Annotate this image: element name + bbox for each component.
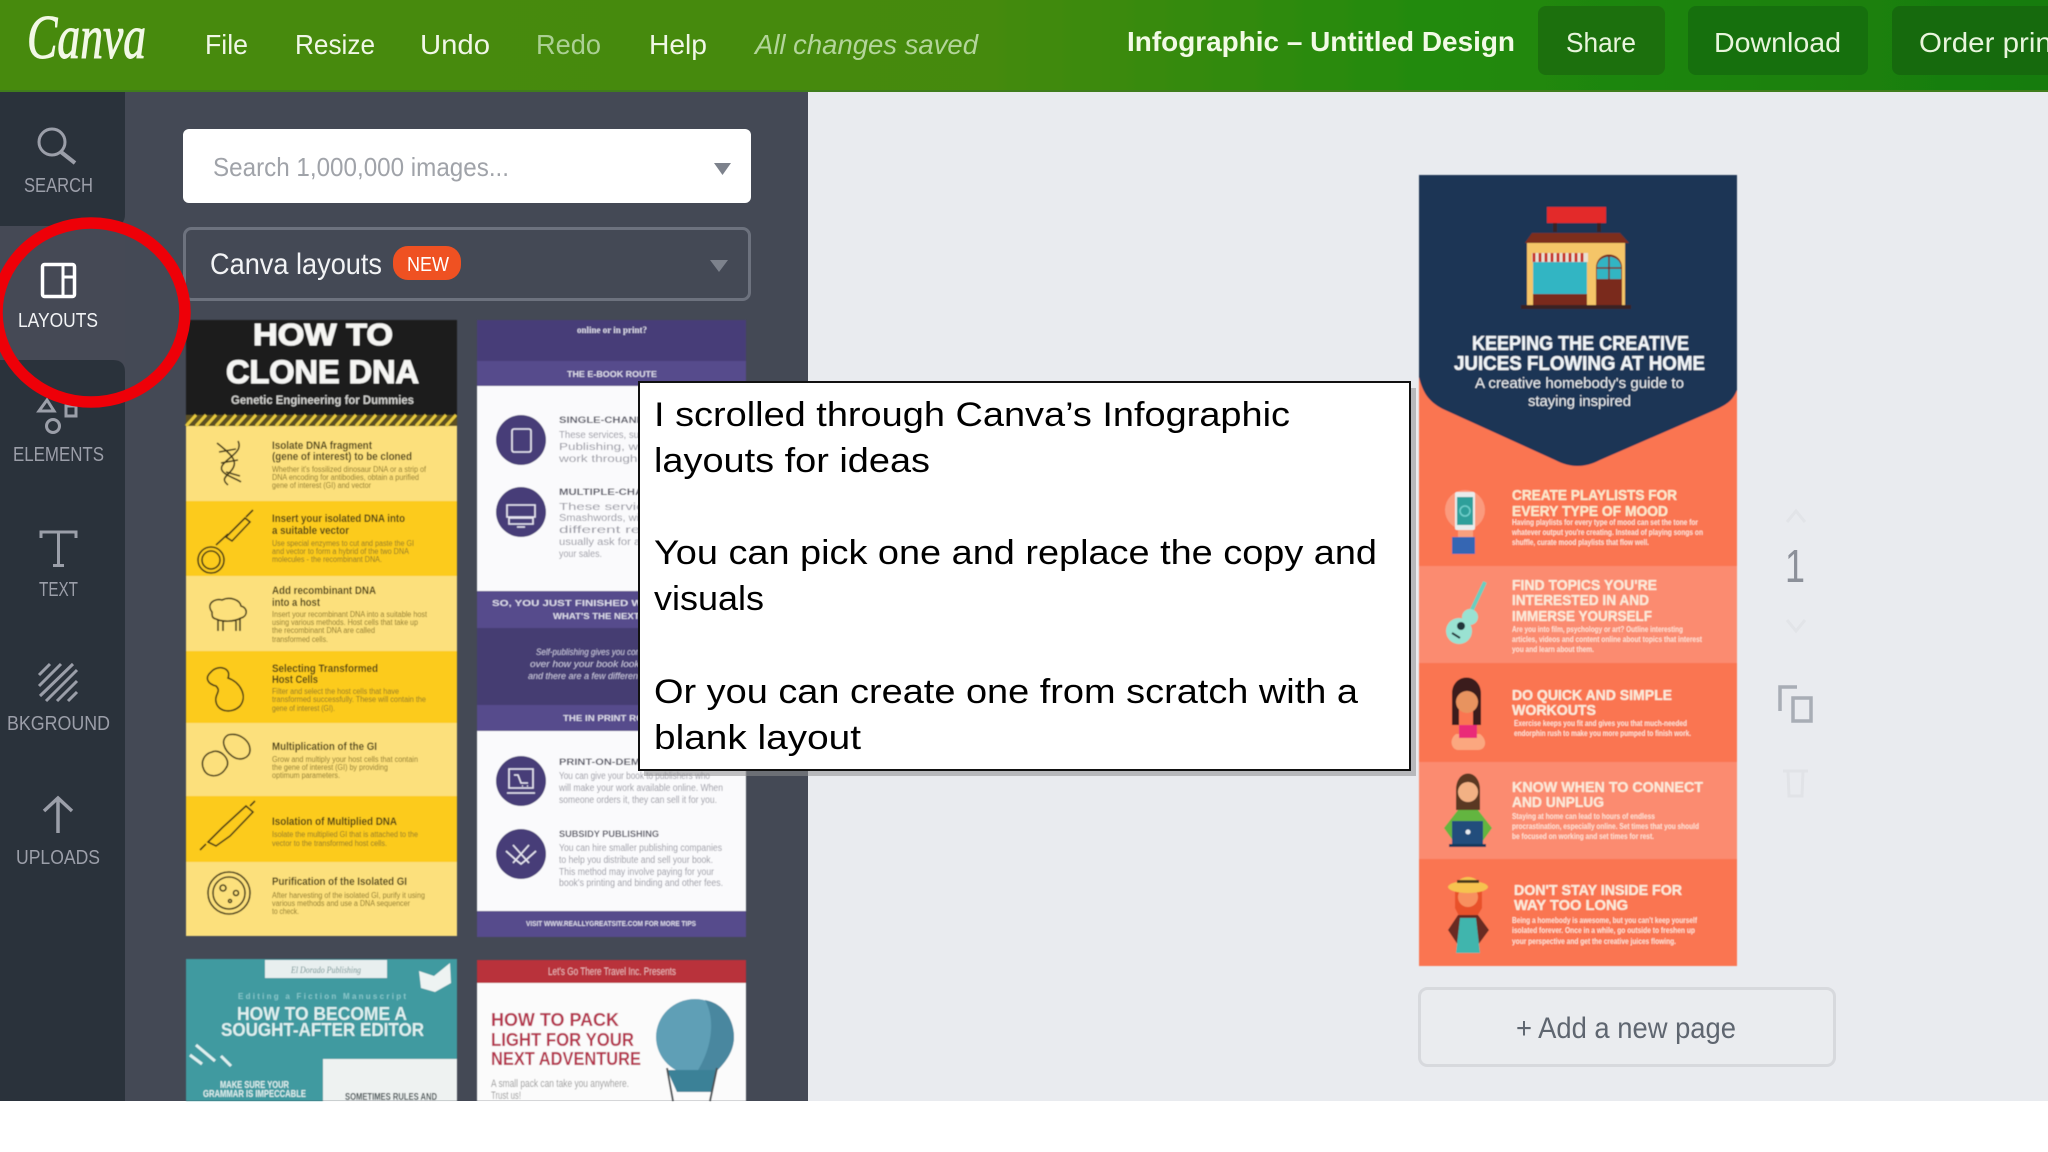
- intro italic text: over how your book looks and sells,: [530, 659, 690, 669]
- step icons: [198, 441, 255, 914]
- nav: search: [24, 129, 93, 197]
- step descriptions: Use special enzymes to cut and paste the GI: [272, 539, 414, 548]
- nav: text: TEXT: [39, 579, 78, 601]
- row descriptions: you and learn about them.: [1512, 644, 1594, 654]
- band labels: VISIT WWW.REALLYGREATSITE.COM FOR MORE TIPS: [526, 921, 696, 928]
- step descriptions: Filter and select the host cells that have: [272, 687, 399, 696]
- thumbnail: self publishing: [477, 320, 746, 937]
- intro italic text: and there are a few different ways to do it: [528, 671, 693, 681]
- nav: uploads: UPLOADS: [16, 847, 100, 869]
- section descriptions: to help you distribute and sell your book.: [559, 855, 713, 866]
- thumbnail: how to clone DNA: [186, 317, 457, 936]
- step descriptions: transformed cells.: [272, 635, 328, 644]
- band labels: SO, YOU JUST FINISHED WRITING A BOOK,: [492, 599, 732, 608]
- thumbnail: sought-after editor: GRAMMAR IS IMPECCABLE: [203, 1089, 306, 1100]
- page tools: [1780, 511, 1811, 796]
- intro italic text: [528, 647, 693, 681]
- move up arrow: [1787, 511, 1805, 522]
- section descriptions: You can give your book to publishers who: [559, 771, 710, 782]
- icon: phone in hand: [1445, 490, 1485, 554]
- section descriptions: book's printing and binding and other fees.: [559, 878, 723, 889]
- row descriptions: shuffle, curate mood playlists that flow well.: [1512, 537, 1649, 547]
- row headings: INTERESTED IN AND: [1512, 592, 1649, 609]
- step descriptions: and vector to form a hybrid of the two DNA: [272, 547, 410, 556]
- icon: multiplying cells: [202, 734, 250, 776]
- save status: All changes saved: [753, 29, 979, 60]
- poster subtitle: A creative homebody's guide to: [1475, 375, 1684, 392]
- header shield: [1419, 175, 1737, 466]
- row headings: CREATE PLAYLISTS FOR: [1512, 487, 1677, 504]
- row descriptions: be focused on working and set times for rest.: [1512, 831, 1654, 841]
- icon: shop: [1521, 207, 1631, 309]
- badge: new: [393, 246, 461, 280]
- icon: pipette and dish: [198, 510, 253, 573]
- search box: [183, 129, 751, 203]
- row descriptions: procrastination, especially online. Set times that you should: [1512, 821, 1699, 831]
- row descriptions: whatever output you're creating. Instead of playing songs on: [1511, 527, 1703, 537]
- button: Share: [1538, 6, 1665, 75]
- step titles: Add recombinant DNA: [272, 585, 376, 597]
- search box: Search 1,000,000 images...: [213, 152, 509, 182]
- icon: petri dish: [208, 872, 250, 914]
- thumbnail: pack light: Trust us!: [491, 1090, 521, 1102]
- page number: 1: [1785, 540, 1805, 592]
- step titles: Host Cells: [272, 674, 318, 686]
- thumbnail: pack light: Let's Go There Travel Inc. Presents: [548, 966, 676, 978]
- section descriptions: This method may involve paying for your: [559, 867, 715, 878]
- section headings: SUBSIDY PUBLISHING: [559, 829, 659, 839]
- row descriptions: Exercise keeps you fit and gives you that much-needed: [1514, 718, 1687, 728]
- row headings: WORKOUTS: [1512, 702, 1596, 719]
- row descriptions: [1511, 517, 1703, 946]
- thumbnail: sought-after editor: SOMETIMES RULES AND: [345, 1092, 437, 1103]
- step titles: Purification of the Isolated GI: [272, 876, 407, 888]
- callout paragraph 1: I scrolled through Canva’s Infographic: [654, 396, 1290, 434]
- left navigation: [0, 92, 125, 1101]
- header text: [226, 317, 419, 407]
- callout box: [639, 382, 1416, 776]
- menu item: Help: Help: [649, 29, 707, 60]
- nav: elements: [13, 400, 104, 466]
- band labels: WHAT'S THE NEXT STEP?: [553, 612, 673, 621]
- step descriptions: using various methods. Host cells that take up: [272, 618, 418, 627]
- logo: Canva: Canva: [27, 4, 146, 72]
- step titles: (gene of interest) to be cloned: [272, 451, 412, 463]
- icon: guitar: [1446, 582, 1485, 644]
- step descriptions: the gene of interest (GI) by providing: [272, 763, 388, 772]
- layouts dropdown: [184, 228, 750, 300]
- row descriptions: isolated forever. Once in a while, go outside to freshen up: [1512, 925, 1695, 935]
- selected infographic: [1419, 175, 1737, 966]
- row headings: DON'T STAY INSIDE FOR: [1514, 882, 1682, 899]
- band labels: THE E-BOOK ROUTE: [567, 370, 658, 379]
- section descriptions: usually ask for an upfront fee on: [559, 537, 719, 548]
- callout paragraph 3: [654, 673, 1359, 757]
- step descriptions: optimum parameters.: [272, 771, 340, 780]
- callout paragraph 3: Or you can create one from scratch with a: [654, 673, 1359, 711]
- nav: background: [7, 664, 110, 735]
- section descriptions: These services, such as Kindle Direct: [559, 430, 719, 441]
- step descriptions: molecules - the recombinant DNA.: [272, 555, 382, 564]
- step titles: Multiplication of the GI: [272, 741, 377, 753]
- step descriptions: gene of interest (GI) and vector: [272, 481, 371, 490]
- design title: Infographic – Untitled Design: [1127, 26, 1515, 57]
- thumbnail: pack light: HOW TO PACK: [491, 1010, 619, 1030]
- nav: search: SEARCH: [24, 175, 93, 197]
- row descriptions: endorphin rush to make you more pumped to finish work.: [1514, 728, 1691, 738]
- section descriptions: different retailers and: [559, 525, 719, 536]
- step titles: Isolation of Multiplied DNA: [272, 816, 397, 828]
- nav: text: [39, 532, 78, 601]
- icon: transformed cell: [207, 668, 243, 711]
- step descriptions: transformed successfully. These will contain the: [272, 695, 426, 704]
- badge: new: NEW: [407, 254, 449, 276]
- row headings: WAY TOO LONG: [1514, 897, 1628, 914]
- thumbnail: pack light: [477, 960, 746, 1102]
- poster subtitle: [1475, 375, 1684, 410]
- step descriptions: DNA encoding for antibodies, obtain a purified: [272, 473, 419, 482]
- icon: DNA helix: [217, 441, 241, 485]
- section descriptions: work through one channel.: [558, 454, 719, 465]
- step descriptions: After harvesting of the isolated GI, purify it using: [272, 891, 425, 900]
- band labels: THE IN PRINT ROUTE: [563, 714, 664, 723]
- add page button: + Add a new page: [1516, 1012, 1736, 1045]
- section headings: PRINT-ON-DEMAND: [559, 757, 665, 767]
- icon: pipette: [200, 801, 255, 850]
- step titles: Selecting Transformed: [272, 663, 378, 675]
- icon: open book: [419, 963, 451, 992]
- step descriptions: Grow and multiply your host cells that contain: [272, 755, 418, 764]
- callout paragraph 3: blank layout: [654, 719, 861, 757]
- step descriptions: Isolate the multiplied GI that is attached to the: [272, 830, 418, 839]
- row descriptions: your perspective and get the creative juices flowing.: [1512, 936, 1676, 946]
- thumbnail: sought-after editor: Editing a Fiction Manuscript: [238, 992, 406, 1001]
- step descriptions: [272, 465, 428, 916]
- row descriptions: articles, videos and content online about topics that interest: [1512, 634, 1702, 644]
- icon: woman with laptop: [1444, 774, 1492, 847]
- row descriptions: Are you into film, psychology or art? Outline interesting: [1512, 624, 1683, 634]
- nav: layouts: [18, 264, 98, 332]
- button: Order print: [1892, 6, 2048, 75]
- step descriptions: Insert your recombinant DNA into a suitable host: [272, 610, 428, 619]
- thumbnail: pack light: A small pack can take you anywhere.: [491, 1078, 629, 1090]
- section descriptions: [558, 430, 723, 889]
- step titles: Insert your isolated DNA into: [272, 513, 405, 525]
- icon: woman exercising: [1452, 678, 1485, 750]
- side panel: [125, 92, 808, 1101]
- menu item: Resize: Resize: [295, 29, 375, 60]
- step titles: [272, 440, 412, 888]
- menu item: File: File: [205, 29, 248, 60]
- button: Share: Share: [1566, 27, 1636, 58]
- row headings: [1512, 487, 1703, 914]
- purple circle icons: [496, 415, 546, 879]
- header text: HOW TO: [253, 317, 393, 352]
- callout paragraph 1: [654, 396, 1290, 480]
- poster title: JUICES FLOWING AT HOME: [1454, 353, 1705, 375]
- row descriptions: Having playlists for every type of mood can set the tone for: [1512, 517, 1699, 527]
- add page button: [1420, 988, 1834, 1066]
- icon: hot-air balloon: [656, 999, 734, 1101]
- thumbnail: sought-after editor: SOUGHT-AFTER EDITOR: [221, 1020, 424, 1040]
- alternate rows: [1419, 566, 1737, 859]
- section descriptions: will make your work available online. When: [558, 783, 723, 794]
- menu item: Undo: Undo: [420, 29, 490, 60]
- poster subtitle: staying inspired: [1528, 393, 1631, 410]
- section descriptions: your sales.: [559, 549, 602, 560]
- section descriptions: These services, such as: [559, 502, 719, 513]
- poster title: KEEPING THE CREATIVE: [1472, 333, 1689, 355]
- header text: Genetic Engineering for Dummies: [231, 393, 414, 407]
- icon: copy page: [1780, 687, 1811, 721]
- nav: background: BKGROUND: [7, 713, 110, 735]
- section descriptions: You can hire smaller publishing companies: [559, 843, 722, 854]
- step descriptions: to check.: [272, 907, 299, 916]
- section descriptions: Publishing, will only let you: [559, 442, 719, 453]
- icon: sheep: [210, 598, 246, 631]
- step titles: Isolate DNA fragment: [272, 440, 372, 452]
- thumbnail: sought-after editor: El Dorado Publishing: [290, 965, 361, 975]
- nav: elements: ELEMENTS: [13, 444, 104, 466]
- thumbnail: sought-after editor: [186, 959, 457, 1103]
- step titles: into a host: [272, 597, 320, 609]
- step titles: a suitable vector: [272, 525, 350, 537]
- step descriptions: the recombinant DNA are called: [272, 626, 375, 635]
- red highlight circle: [0, 223, 185, 402]
- thumbnail: sought-after editor: MAKE SURE YOUR: [220, 1080, 290, 1091]
- move down arrow: [1787, 620, 1805, 631]
- thumbnail: pack light: LIGHT FOR YOUR: [491, 1030, 634, 1050]
- band labels: online or in print?: [577, 325, 647, 335]
- step descriptions: vector to the transformed host cells.: [272, 839, 387, 848]
- poster title: [1454, 333, 1705, 375]
- nav: uploads: [16, 798, 100, 869]
- thumbnail: pack light: NEXT ADVENTURE: [491, 1049, 641, 1069]
- callout paragraph 1: layouts for ideas: [654, 442, 930, 480]
- top toolbar: [0, 0, 2048, 92]
- section descriptions: someone orders it, they can sell it for you.: [559, 795, 717, 806]
- section headings: MULTIPLE-CHANNEL: [559, 487, 675, 497]
- section headings: [559, 415, 675, 839]
- step descriptions: gene of interest (GI).: [272, 704, 335, 713]
- intro italic text: Self-publishing gives you complete control: [536, 647, 687, 657]
- thumbnails: [186, 317, 746, 1103]
- layouts dropdown: Canva layouts: [210, 248, 382, 281]
- row headings: IMMERSE YOURSELF: [1512, 608, 1652, 625]
- row headings: AND UNPLUG: [1512, 794, 1604, 811]
- callout paragraph 2: visuals: [654, 580, 764, 618]
- row headings: FIND TOPICS YOU'RE: [1512, 577, 1657, 594]
- menu item: Redo: Redo: [536, 29, 601, 60]
- callout paragraph 2: [654, 534, 1377, 618]
- section descriptions: Smashwords, will help you reach: [559, 513, 719, 524]
- step descriptions: various methods and use a DNA sequencer: [272, 899, 410, 908]
- section headings: SINGLE-CHANNEL: [559, 415, 660, 425]
- thumbnail: sought-after editor: HOW TO BECOME A: [237, 1004, 407, 1024]
- step descriptions: Whether it's fossilized dinosaur DNA or a strip of: [272, 465, 427, 474]
- row headings: EVERY TYPE OF MOOD: [1512, 503, 1668, 520]
- header text: CLONE DNA: [226, 354, 419, 390]
- band labels: [492, 325, 732, 928]
- row descriptions: Staying at home can lead to hours of endless: [1512, 811, 1655, 821]
- row headings: DO QUICK AND SIMPLE: [1512, 687, 1672, 704]
- nav: layouts: LAYOUTS: [18, 310, 98, 332]
- canvas background: [808, 92, 2048, 1101]
- button: Download: Download: [1714, 27, 1841, 58]
- row descriptions: Being a homebody is awesome, but you can't keep yourself: [1512, 915, 1697, 925]
- icon: woman with hat: [1448, 877, 1489, 953]
- row headings: KNOW WHEN TO CONNECT: [1512, 779, 1703, 796]
- callout paragraph 2: You can pick one and replace the copy and: [654, 534, 1377, 572]
- icon: delete page: [1783, 771, 1808, 796]
- button: Download: [1688, 6, 1868, 75]
